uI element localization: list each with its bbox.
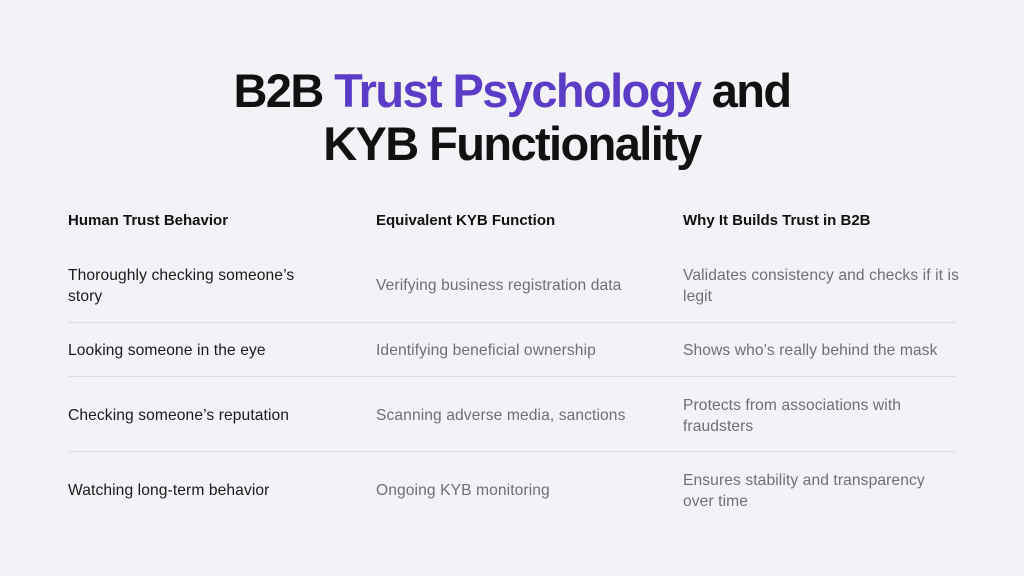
- row 1: Verifying business registration data: [376, 277, 621, 294]
- row 1: [68, 267, 959, 305]
- row 3: Scanning adverse media, sanctions: [376, 407, 625, 424]
- row 2: [68, 342, 938, 359]
- row 2: Identifying beneficial ownership: [376, 342, 596, 359]
- row 1: Validates consistency and checks if it is legit: [683, 267, 959, 305]
- row 2: Looking someone in the eye: [68, 342, 266, 359]
- row 4: [68, 472, 925, 510]
- row 3: Protects from associations with fraudsters: [683, 397, 901, 435]
- title: KYB Functionality: [323, 117, 701, 170]
- header row: Equivalent KYB Function: [376, 212, 555, 229]
- title: B2B Trust Psychology and: [233, 64, 791, 117]
- row 1: Thoroughly checking someone’s story: [68, 267, 294, 305]
- header row: Why It Builds Trust in B2B: [683, 212, 871, 229]
- header row: Human Trust Behavior: [68, 212, 228, 229]
- row 2: Shows who’s really behind the mask: [683, 342, 937, 359]
- row 3: [68, 397, 901, 435]
- row 4: Ensures stability and transparency over time: [683, 472, 925, 510]
- header row: [68, 212, 871, 229]
- row 4: Watching long-term behavior: [68, 482, 269, 499]
- row 3: Checking someone’s reputation: [68, 407, 289, 424]
- row 4: Ongoing KYB monitoring: [376, 482, 550, 499]
- table: [68, 212, 959, 510]
- title: [233, 64, 791, 170]
